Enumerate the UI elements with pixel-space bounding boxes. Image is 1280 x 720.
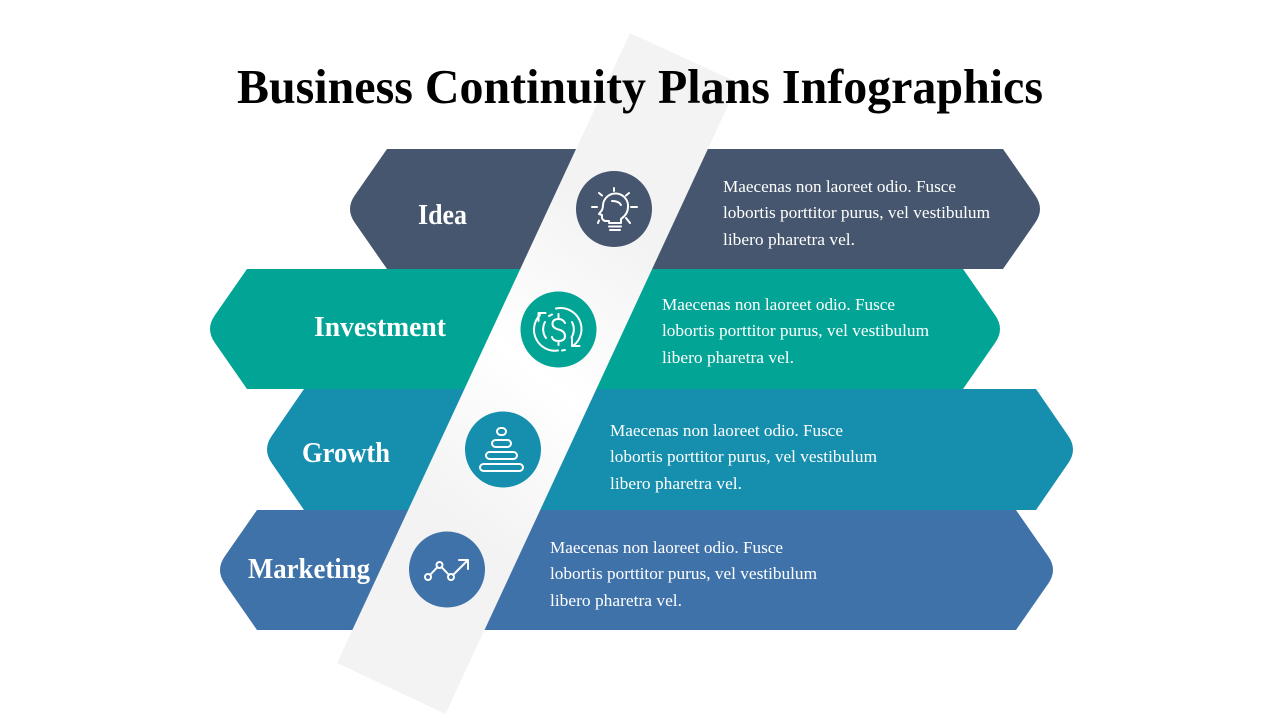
text block: Investment — [662, 295, 930, 367]
text block: Marketing: Maecenas non laoreet odio. Fusce — [550, 538, 783, 557]
row: Marketing band — [220, 510, 1053, 630]
text block: Investment: Maecenas non laoreet odio. Fusce — [662, 295, 895, 314]
row: Growth band — [267, 389, 1073, 510]
text block: Investment: lobortis porttitor purus, vel vestibulum — [662, 321, 930, 340]
diagonal ribbon — [337, 33, 738, 714]
icon: light bulb — [576, 171, 652, 247]
text block: Idea: libero pharetra vel. — [723, 230, 855, 249]
heading: Marketing: Marketing — [248, 554, 370, 585]
heading: Idea: Idea — [418, 200, 467, 231]
text block: Marketing: libero pharetra vel. — [550, 591, 682, 610]
heading: Growth: Growth — [302, 438, 390, 469]
text block: Investment: libero pharetra vel. — [662, 348, 794, 367]
text block: Idea: Maecenas non laoreet odio. Fusce — [723, 177, 956, 196]
heading: Investment: Investment — [314, 312, 446, 343]
text block: Growth: Maecenas non laoreet odio. Fusce — [610, 421, 843, 440]
text block: Growth — [610, 421, 878, 493]
text block: Idea: lobortis porttitor purus, vel vestibulum — [723, 203, 991, 222]
title: Business Continuity Plans Infographics — [237, 59, 1043, 114]
text block: Idea — [723, 177, 991, 249]
row: Investment band — [210, 269, 1000, 389]
row: Idea band — [350, 149, 1040, 269]
icon: stacked rings — [465, 412, 541, 488]
text block: Marketing — [550, 538, 818, 610]
icon: trend line — [409, 532, 485, 608]
icon: dollar cycle — [520, 292, 596, 368]
text block: Growth: lobortis porttitor purus, vel vestibulum — [610, 447, 878, 466]
text block: Marketing: lobortis porttitor purus, vel vestibulum — [550, 564, 818, 583]
text block: Growth: libero pharetra vel. — [610, 474, 742, 493]
